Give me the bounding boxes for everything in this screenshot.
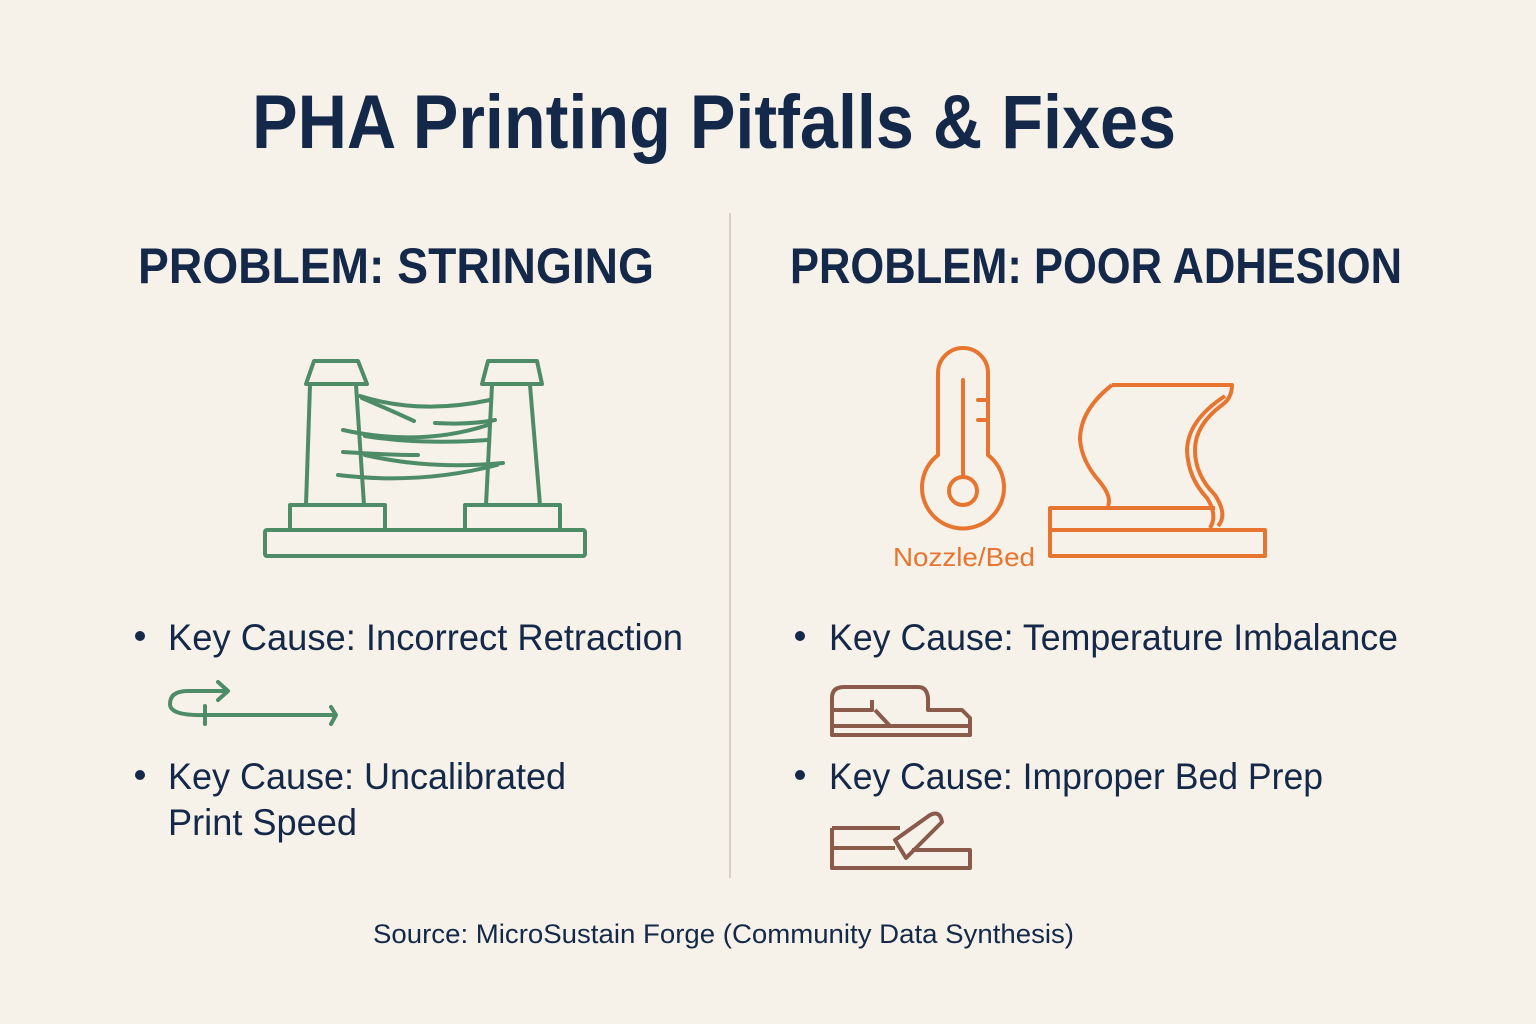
icon: peeling print [1050,385,1265,556]
panel: poor adhesion [790,238,1402,868]
icon: stringing towers [265,361,585,556]
bullet: print speed: Print Speed [168,802,357,843]
label: nozzle/bed: Nozzle/Bed [893,542,1035,572]
icon: scraper on bed [832,814,970,868]
icon: warped layers [832,687,970,735]
bullet: print speed: Key Cause: Uncalibrated [168,756,566,797]
bullet: print speed [135,756,566,843]
heading: poor adhesion: PROBLEM: POOR ADHESION [790,238,1402,294]
heading: stringing: PROBLEM: STRINGING [138,238,654,294]
bullet: temperature imbalance: Key Cause: Temperature Imbalance [829,617,1398,658]
bullet: improper bed prep: Key Cause: Improper Bed Prep [829,756,1323,797]
bullet: incorrect retraction: Key Cause: Incorrect Retraction [168,617,683,658]
title: PHA Printing Pitfalls & Fixes [252,80,1176,165]
icon: thermometer [922,348,1004,528]
icon: retraction arrow [170,682,336,724]
panel: stringing [135,238,683,843]
source: Source: MicroSustain Forge (Community Data Synthesis) [373,919,1074,949]
